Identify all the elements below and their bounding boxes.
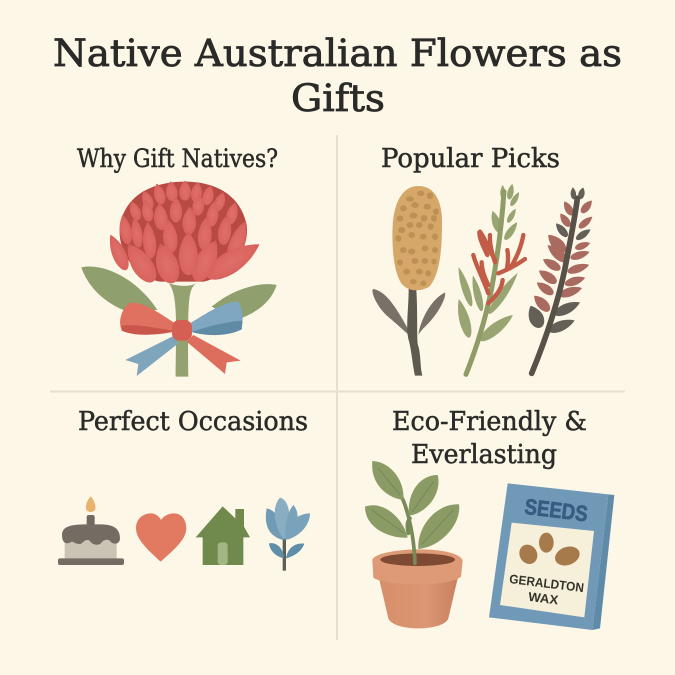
heading: eco-friendly and everlasting: Eco-Friendly & bbox=[392, 407, 587, 437]
icon: birthday cake bbox=[58, 496, 124, 565]
illustration: potted plant and seed packet bbox=[365, 461, 614, 630]
seed packet: WAX bbox=[528, 590, 560, 608]
kangaroo paw sprig bbox=[454, 183, 525, 374]
heading: why gift natives: Why Gift Natives? bbox=[77, 144, 278, 173]
icon: blue flower bbox=[266, 498, 310, 571]
leaves bbox=[81, 267, 277, 320]
seed packet bbox=[489, 483, 614, 630]
flower head bbox=[104, 181, 265, 287]
stem bbox=[169, 283, 196, 377]
heading: eco-friendly and everlasting: Everlasting bbox=[411, 440, 557, 470]
banksia bbox=[372, 186, 445, 374]
title: Gifts bbox=[291, 77, 385, 120]
seed packet: SEEDS bbox=[523, 494, 589, 526]
potted plant bbox=[365, 461, 463, 628]
heading: popular picks: Popular Picks bbox=[381, 144, 560, 174]
icon: house bbox=[196, 506, 250, 565]
icon: heart bbox=[136, 513, 186, 562]
seeds bbox=[516, 533, 582, 569]
heading: perfect occasions: Perfect Occasions bbox=[78, 407, 308, 437]
grevillea sprig bbox=[524, 187, 595, 373]
seed packet: GERALDTON bbox=[509, 572, 585, 595]
heading: eco-friendly and everlasting bbox=[392, 407, 587, 470]
illustration: occasions icons bbox=[58, 496, 310, 571]
illustration: waratah with ribbon bbox=[81, 181, 277, 377]
title: Native Australian Flowers as bbox=[53, 32, 622, 75]
illustration: popular picks plants bbox=[372, 183, 595, 374]
title bbox=[53, 32, 622, 120]
ribbon bow bbox=[120, 302, 243, 376]
